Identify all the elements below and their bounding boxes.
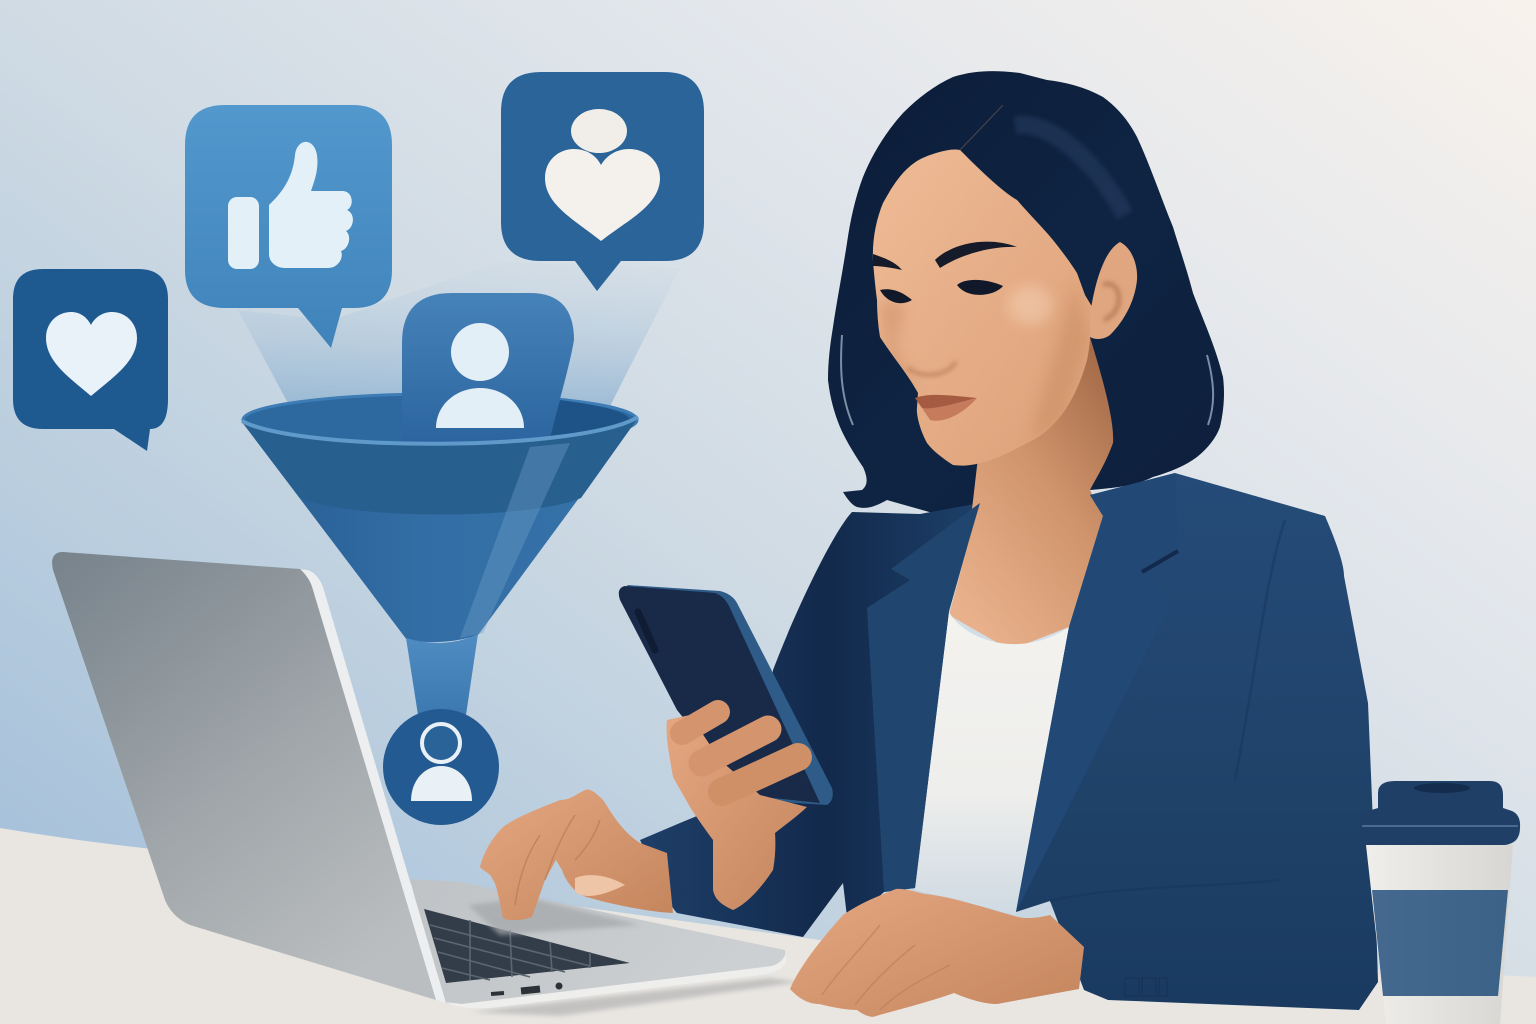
hand on laptop (480, 789, 673, 920)
neck (949, 337, 1113, 650)
funnel stem (406, 634, 478, 715)
funnel intake light beam (238, 262, 680, 420)
ear (1090, 242, 1137, 339)
sleeve seam (1050, 520, 1285, 901)
lips (915, 395, 977, 421)
table top (0, 828, 1536, 1024)
cup lid (1358, 781, 1520, 845)
icon: person bubble dropping into funnel (402, 293, 574, 442)
icon: heart speech bubble (13, 269, 168, 451)
funnel cone (242, 418, 638, 642)
funnel front rim (242, 417, 638, 444)
eyes (880, 280, 1003, 303)
laptop trackpad shadow (468, 898, 640, 935)
icon: person with heart speech bubble (501, 72, 704, 291)
funnel (242, 293, 638, 715)
face (873, 150, 1103, 466)
laptop ports (491, 993, 504, 994)
icon: thumbs up speech bubble (185, 105, 392, 348)
white tee (915, 612, 1069, 915)
laptop keyboard (424, 909, 630, 983)
hair parting (960, 105, 1003, 150)
cup body (1366, 845, 1513, 1024)
right body of blazer (1016, 473, 1378, 1010)
blazer (867, 473, 1378, 1010)
woman (480, 71, 1378, 1017)
laptop lid (52, 552, 445, 1002)
laptop base (410, 879, 785, 1004)
funnel back rim (243, 394, 637, 446)
hair sheen (1015, 125, 1125, 215)
phone (619, 585, 833, 805)
face shading (880, 300, 909, 378)
left blazer sleeve and front (640, 503, 980, 937)
cup sleeve (1372, 890, 1508, 996)
right lapel (1016, 473, 1178, 912)
left lapel (867, 503, 980, 892)
hair (828, 71, 1224, 525)
hair highlights (841, 335, 1213, 425)
hand on table (790, 889, 1084, 1017)
laptop (52, 552, 800, 1016)
eyebrows (873, 242, 1017, 270)
cuff buttons (1125, 978, 1167, 996)
coffee cup (1358, 781, 1520, 1024)
hand holding phone (667, 712, 807, 910)
laptop table shadow (470, 978, 800, 1016)
icon: person in funnel output circle (383, 709, 499, 825)
